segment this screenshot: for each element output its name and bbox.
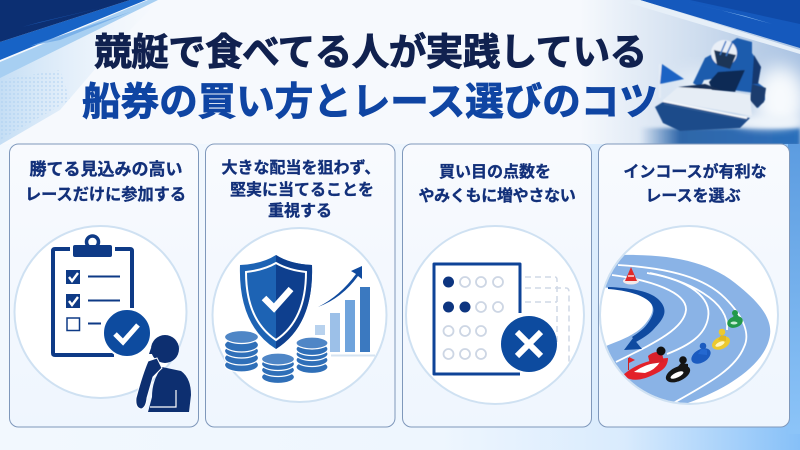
card 3 heading [418,162,576,205]
buoy [623,267,639,284]
red boat [623,346,668,380]
decoration: top-right diagonal band [626,0,800,54]
icon: ticket sheet with marks [434,264,520,374]
track water [600,255,770,408]
icon: coin stacks [224,330,328,384]
white lane lines [612,265,746,405]
card 2 heading: 重視する [268,202,332,220]
card 1 heading: レースだけに参加する [25,185,186,204]
card 2 heading [222,159,380,220]
icon: rising arrow [318,266,362,307]
title [82,31,658,124]
card 4 heading: インコースが有利な [623,162,767,181]
title line 2: 船券の買い方とレース選びのコツ [82,81,658,124]
card 3 heading: やみくもに増やさない [418,186,576,205]
circle [212,228,386,402]
decoration: top-left diagonal bands [0,0,160,145]
circle [600,226,778,404]
rider [693,38,766,108]
icon: dashed extra sheets [525,277,569,365]
bar chart [315,287,375,356]
yellow boat [712,328,730,350]
spray and water [640,66,800,146]
panel: card 3 [402,144,592,427]
circle [14,226,186,398]
card 2 heading: 大きな配当を狙わず、 [222,159,380,177]
icon: check badge [103,309,151,357]
panel: card 4 [598,144,790,427]
photo: boat racer on the water [640,38,800,146]
inner course arrow [608,287,664,342]
card 3 heading: 買い目の点数を [439,162,551,181]
icon: thinking person [136,335,191,412]
blue boat [691,342,711,364]
card 2 heading: 堅実に当てることを [230,181,374,199]
icon: clipboard checklist [53,236,132,355]
card 4 heading [623,162,767,205]
panel: card 2 [206,144,395,427]
panel: card 1 [10,144,198,427]
black boat [666,356,690,382]
icon: shield with check [240,255,312,349]
flag [659,64,684,98]
hull [655,84,752,131]
card 4 heading: レースを選ぶ [645,187,741,205]
card 1 heading: 勝てる見込みの高い [30,159,182,179]
card 1 heading [25,159,186,204]
title line 1: 競艇で食べてる人が実践している [94,31,647,73]
race course [600,255,770,408]
icon: X badge [501,316,557,372]
green boat [727,310,743,328]
circle [406,226,584,404]
